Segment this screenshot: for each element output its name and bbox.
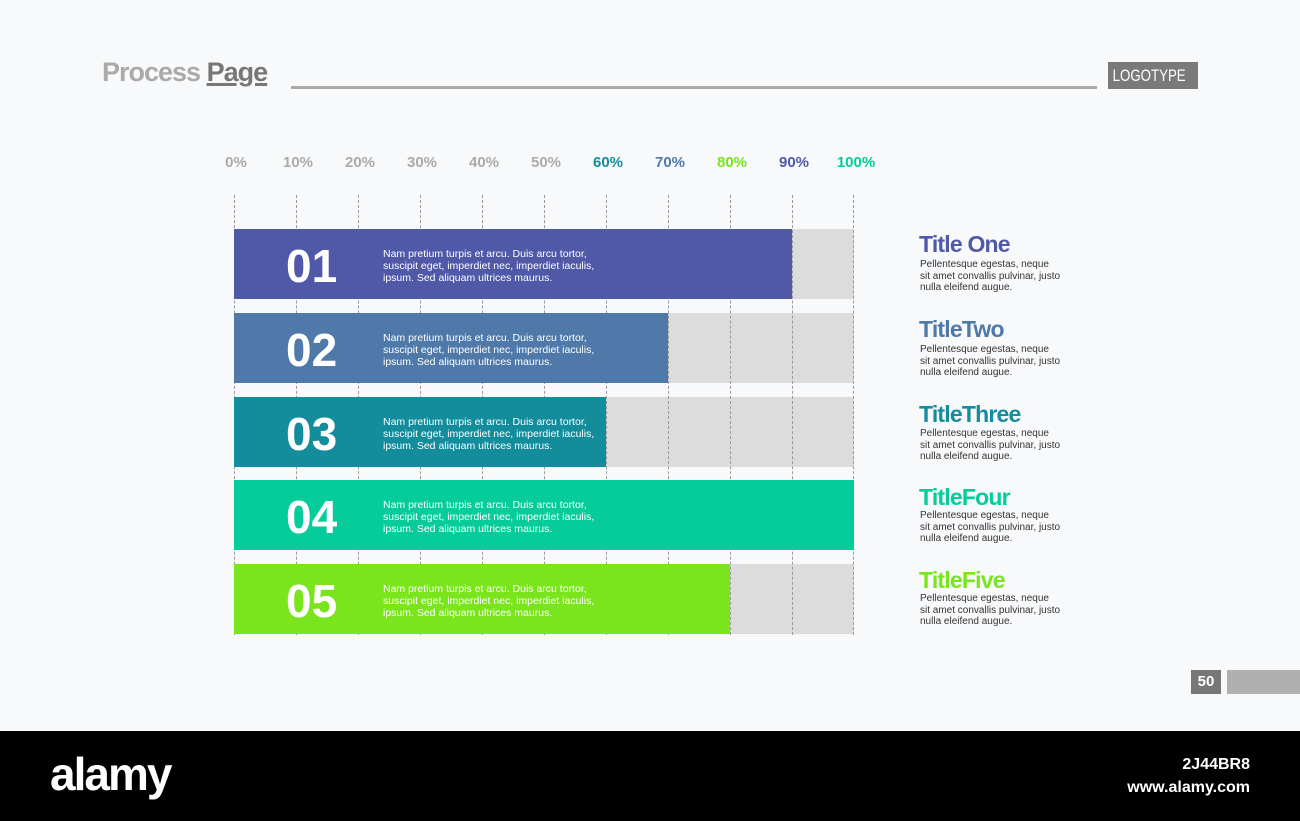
footer band: www.alamy.com (1127, 779, 1250, 796)
bar 04: Nam pretium turpis et arcu. Duis arcu tortor, suscipit eget, imperdiet nec, imperdiet iaculis, ipsum. Sed aliquam ultrices maurus. (383, 499, 594, 535)
bar 04 (234, 480, 854, 550)
logotype: LOGOTYPE (1113, 66, 1186, 85)
title: Process Page (102, 57, 267, 87)
axis labels: 30% (407, 154, 437, 171)
axis labels (225, 154, 875, 171)
legend titles: Title One (919, 231, 1010, 257)
legend titles (919, 231, 1060, 627)
logotype (1108, 62, 1198, 89)
page number (1191, 670, 1221, 694)
legend titles: TitleFour (919, 484, 1010, 510)
legend titles: Pellentesque egestas, neque (920, 259, 1049, 270)
footer band: alamy (50, 748, 170, 800)
legend titles: TitleFive (919, 567, 1005, 593)
bar 02: Nam pretium turpis et arcu. Duis arcu tortor, suscipit eget, imperdiet nec, imperdiet iaculis, ipsum. Sed aliquam ultrices maurus. (383, 332, 594, 368)
header rule (291, 86, 1097, 89)
axis labels: 100% (837, 154, 875, 171)
axis labels: 40% (469, 154, 499, 171)
bar 05: Nam pretium turpis et arcu. Duis arcu tortor, suscipit eget, imperdiet nec, imperdiet iaculis, ipsum. Sed aliquam ultrices maurus. (383, 583, 594, 619)
bar 05: 05 (286, 575, 337, 627)
axis labels: 80% (717, 154, 747, 171)
axis labels: 0% (225, 154, 247, 171)
legend titles: sit amet convallis pulvinar, justo (920, 356, 1060, 366)
axis labels: 10% (283, 154, 313, 171)
legend titles: nulla eleifend augue. (920, 451, 1012, 462)
bar 01 (234, 229, 792, 299)
legend titles: sit amet convallis pulvinar, justo (920, 604, 1060, 616)
legend titles: Pellentesque egestas, neque (920, 428, 1049, 439)
bar chart (234, 195, 854, 635)
page bar (1227, 670, 1300, 694)
bar 01: Nam pretium turpis et arcu. Duis arcu tortor, suscipit eget, imperdiet nec, imperdiet iaculis, ipsum. Sed aliquam ultrices maurus. (383, 248, 594, 284)
legend titles: sit amet convallis pulvinar, justo (920, 522, 1060, 532)
bar 01: 01 (286, 240, 337, 292)
footer band: 2J44BR8 (1182, 756, 1250, 773)
legend titles: nulla eleifend augue. (920, 533, 1012, 544)
bar 03: 03 (286, 408, 337, 460)
legend titles: TitleTwo (919, 316, 1004, 342)
axis labels: 90% (779, 154, 809, 171)
bar 02: 02 (286, 324, 337, 376)
axis labels: 60% (593, 154, 623, 171)
footer band (0, 731, 1300, 821)
bar 04: 04 (286, 491, 337, 543)
legend titles: sit amet convallis pulvinar, justo (920, 270, 1060, 282)
page number: 50 (1198, 673, 1214, 690)
legend titles: Pellentesque egestas, neque (920, 344, 1049, 355)
legend titles: nulla eleifend augue. (920, 616, 1012, 627)
legend titles: Pellentesque egestas, neque (920, 593, 1049, 604)
bar 03 (234, 397, 606, 467)
bar 03: Nam pretium turpis et arcu. Duis arcu tortor, suscipit eget, imperdiet nec, imperdiet iaculis, ipsum. Sed aliquam ultrices maurus. (383, 416, 594, 452)
legend titles: sit amet convallis pulvinar, justo (920, 440, 1060, 450)
axis labels: 20% (345, 154, 375, 171)
axis labels: 70% (655, 154, 685, 171)
legend titles: TitleThree (919, 401, 1020, 427)
bar 02 (234, 313, 668, 383)
legend titles: nulla eleifend augue. (920, 367, 1012, 378)
axis labels: 50% (531, 154, 561, 171)
bar 05 (234, 564, 730, 634)
legend titles: nulla eleifend augue. (920, 282, 1012, 293)
legend titles: Pellentesque egestas, neque (920, 510, 1049, 521)
